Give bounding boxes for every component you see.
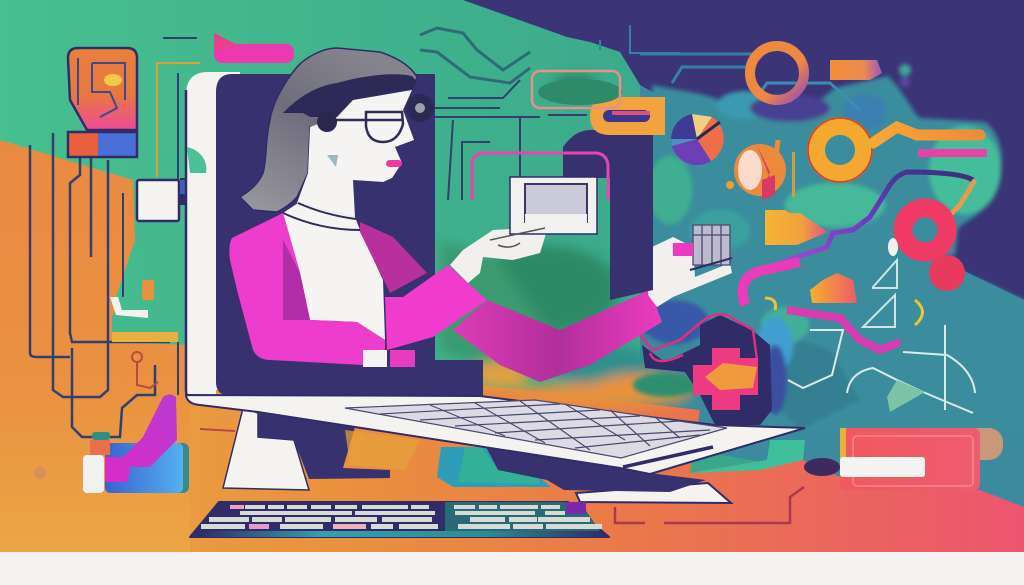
- lips: [386, 160, 402, 167]
- icon: orange folder: [765, 210, 828, 245]
- hand 1: [450, 227, 548, 283]
- icon: pie chart: [671, 114, 724, 165]
- collar lines: [283, 203, 360, 230]
- data blob: large teal and green mass: [633, 64, 1024, 430]
- side camera: [406, 94, 434, 122]
- icon: white square connector: [137, 178, 204, 221]
- icon: red dot: [929, 255, 965, 291]
- monitor deck: [186, 395, 805, 474]
- cuff square: [363, 350, 387, 367]
- line: pink dash: [918, 149, 987, 157]
- forearm: [453, 290, 662, 382]
- line: pink thin waves: [640, 314, 757, 361]
- icon: orange tag: [830, 60, 882, 80]
- person: [229, 48, 732, 382]
- circuit lines: top, left and right: [30, 25, 860, 523]
- icon: small orange folder: [810, 273, 857, 303]
- line: magenta wave: [742, 262, 800, 305]
- icon: pink bar at top: [214, 33, 294, 63]
- jacket fold: [283, 240, 310, 320]
- hand 2: [648, 237, 732, 307]
- panel: bottom-right button: [840, 428, 1003, 490]
- line: purple wave: [763, 172, 973, 270]
- line: yellow squiggles: [765, 298, 922, 325]
- hand 1 detail: [490, 228, 545, 247]
- icon: flame burst: [726, 140, 795, 200]
- line: magenta lower wave: [787, 310, 900, 350]
- smudge: dark blob near button: [804, 458, 840, 476]
- shape: navy patch around cross: [642, 315, 772, 425]
- icon: orange spiral panel: [68, 48, 137, 130]
- monitor stand: [223, 408, 390, 490]
- keyboard on deck: [343, 400, 727, 458]
- icon: small grid card: [673, 225, 732, 270]
- line: orange connector: [873, 127, 980, 143]
- monitor base: [486, 447, 731, 503]
- hair: [240, 48, 417, 212]
- line: orange swoosh: [945, 180, 975, 220]
- icon: gear ring: [808, 118, 872, 182]
- face and neck: [297, 90, 414, 217]
- card: floating window: [510, 177, 597, 234]
- icon: bottom-left bar shape: [83, 394, 189, 493]
- icon: red and blue tab: [68, 132, 137, 157]
- background: green patch beneath white box: [110, 215, 182, 342]
- monitor body: [186, 72, 483, 404]
- hair: dark band: [283, 74, 417, 117]
- left arm: [385, 265, 487, 350]
- icon: pink ring: [903, 208, 947, 252]
- shape: dark tower: [563, 130, 653, 300]
- icon: orange ring top: [750, 46, 804, 100]
- earpiece: [317, 112, 337, 132]
- jacket hem: [390, 350, 415, 367]
- jacket far side: [360, 222, 427, 293]
- glasses: [335, 112, 403, 142]
- shape: pale green facet: [887, 380, 925, 412]
- icon: orange capsule: [590, 97, 665, 135]
- background: mottled green and teal behind the arm: [440, 75, 690, 407]
- line: white curves: [788, 325, 975, 413]
- icon: pink cross block: [693, 348, 758, 410]
- line: pink connector: [472, 153, 608, 200]
- shirt: [283, 203, 385, 340]
- teal patch under deck: [345, 430, 551, 487]
- icon: white knob: [888, 238, 898, 256]
- icon: small faint dot: [34, 467, 46, 479]
- icon: pink outline capsule: [532, 71, 622, 108]
- icon: outline triangles: [863, 260, 897, 327]
- neck shadow: [327, 155, 338, 167]
- keyboard: desk keyboard: [190, 502, 609, 537]
- jacket: [229, 213, 385, 365]
